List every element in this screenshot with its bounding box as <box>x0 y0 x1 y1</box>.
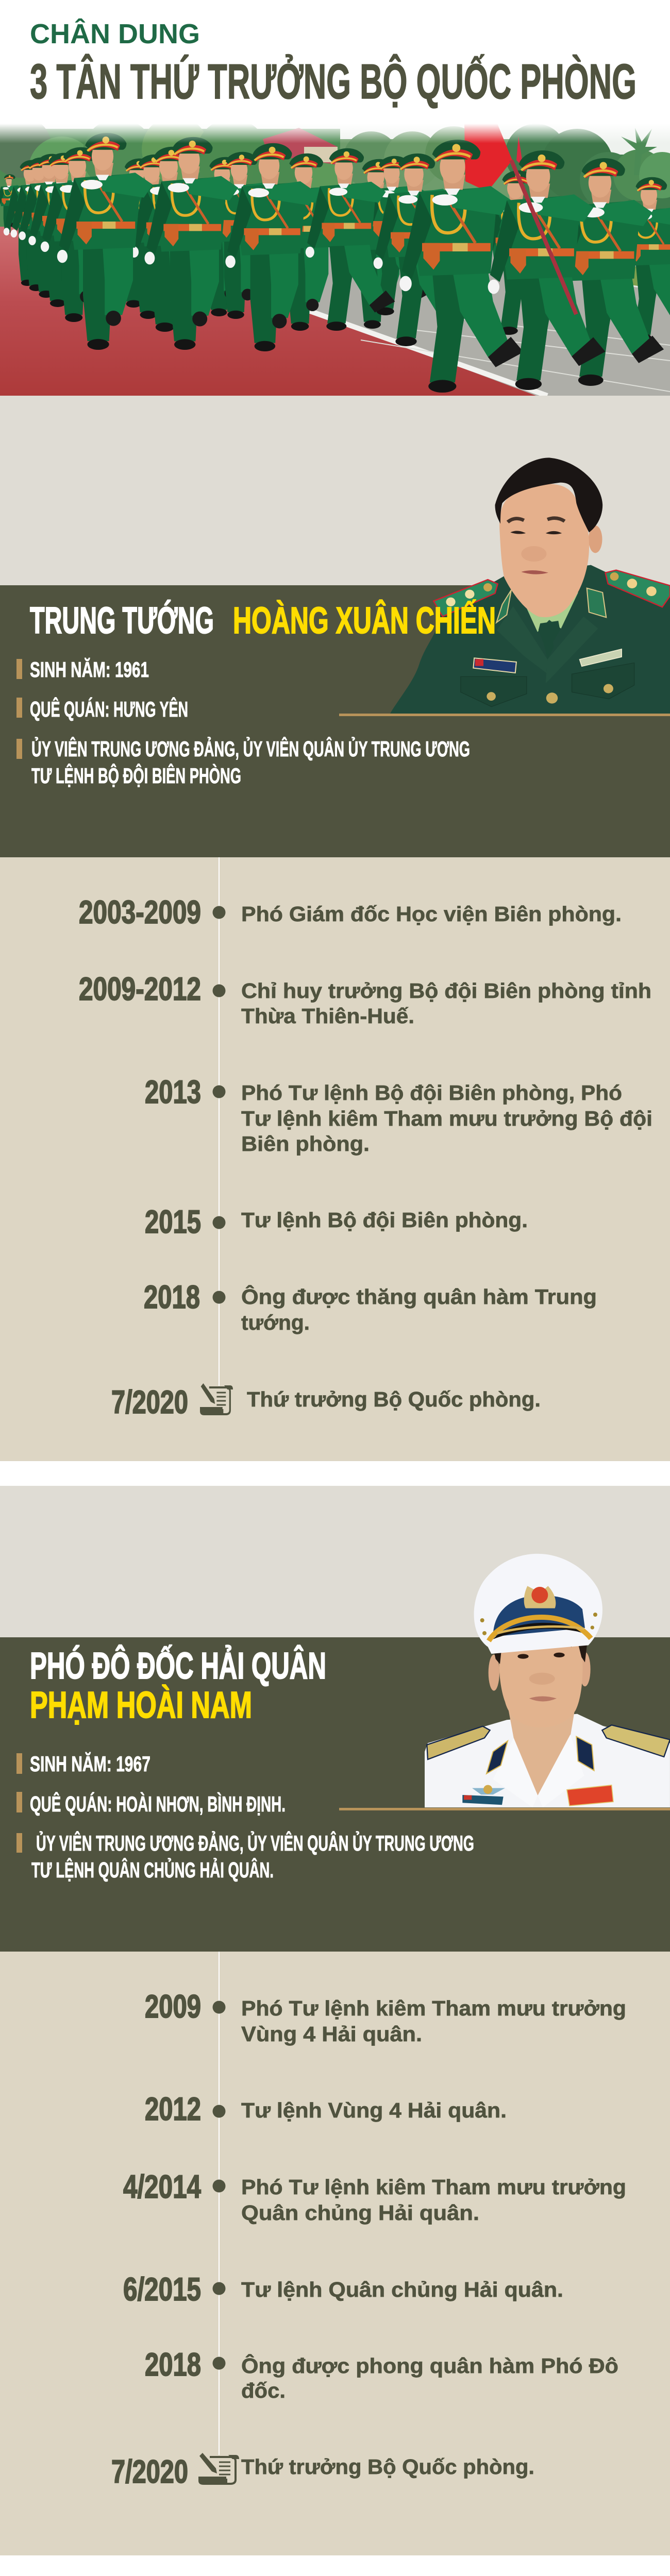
profile details 2: TƯ LỆNH QUÂN CHỦNG HẢI QUÂN. <box>31 1857 274 1882</box>
entry 2003-2009: Phó Giám đốc Học viện Biên phòng. <box>241 902 622 926</box>
hero photo: marching soldiers <box>0 116 670 396</box>
entry 7/2020: Thứ trưởng Bộ Quốc phòng. <box>247 1387 541 1411</box>
entry 7/2020: 7/2020 <box>111 2454 188 2490</box>
entry 4/2014: Phó Tư lệnh kiêm Tham mưu trưởng <box>241 2175 626 2199</box>
name: Phạm Hoài Nam: PHẠM HOÀI NAM <box>30 1685 252 1726</box>
accent rule <box>339 1808 670 1810</box>
entry 2018: Ông được phong quân hàm Phó Đô <box>241 2354 618 2378</box>
entry 2003-2009: 2003-2009 <box>79 894 201 930</box>
entry 2013: Phó Tư lệnh Bộ đội Biên phòng, Phó <box>241 1081 622 1105</box>
entry 2018: 2018 <box>145 2347 201 2383</box>
name: Hoàng Xuân Chiến: HOÀNG XUÂN CHIẾN <box>233 600 496 641</box>
entry 2015: 2015 <box>145 1204 201 1240</box>
timeline 2 <box>111 1989 626 2490</box>
portrait: Phạm Hoài Nam <box>425 1554 670 1807</box>
entry 2018 <box>144 1279 597 1334</box>
entry 2012 <box>145 2091 507 2127</box>
entry 2009 <box>145 1989 626 2046</box>
entry 2013: Tư lệnh kiêm Tham mưu trưởng Bộ đội <box>241 1107 652 1130</box>
profile details 1: TƯ LỆNH BỘ ĐỘI BIÊN PHÒNG <box>31 763 241 788</box>
portrait: Hoàng Xuân Chiến <box>390 457 670 714</box>
title: CHÂN DUNG <box>30 18 200 49</box>
entry 2018: Ông được thăng quân hàm Trung <box>241 1285 597 1309</box>
entry 7/2020: 7/2020 <box>111 1384 188 1420</box>
entry 2018: tướng. <box>241 1311 310 1334</box>
entry 6/2015: 6/2015 <box>123 2272 201 2308</box>
name: Phạm Hoài Nam <box>30 1645 326 1726</box>
entry 2018: 2018 <box>144 1279 200 1315</box>
entry 2009-2012 <box>79 971 651 1028</box>
timeline 1 <box>79 894 652 1420</box>
entry 2015 <box>145 1204 528 1240</box>
entry 6/2015 <box>123 2272 563 2308</box>
name: Hoàng Xuân Chiến: TRUNG TƯỚNG <box>30 600 214 641</box>
entry 2009-2012: 2009-2012 <box>79 971 201 1007</box>
entry 2018 <box>145 2347 618 2402</box>
accent rule <box>339 714 670 716</box>
profile details 1: SINH NĂM: 1961 <box>30 657 149 682</box>
name: Phạm Hoài Nam: PHÓ ĐÔ ĐỐC HẢI QUÂN <box>30 1645 326 1687</box>
entry 2012: 2012 <box>145 2091 201 2127</box>
entry 2009: Vùng 4 Hải quân. <box>241 2022 422 2046</box>
title <box>30 18 636 109</box>
entry 2013 <box>145 1074 652 1156</box>
section 2 background <box>0 1486 670 2555</box>
profile details 1: QUÊ QUÁN: HƯNG YÊN <box>30 697 188 721</box>
entry 2009: 2009 <box>145 1989 201 2025</box>
name: Hoàng Xuân Chiến <box>30 600 496 641</box>
entry 2018: đốc. <box>241 2379 286 2402</box>
entry 6/2015: Tư lệnh Quân chủng Hải quân. <box>241 2278 563 2301</box>
entry 2003-2009 <box>79 894 622 930</box>
profile details 2 <box>16 1752 474 1882</box>
entry 2009-2012: Thừa Thiên-Huế. <box>241 1004 414 1028</box>
section 1 background <box>0 396 670 1461</box>
section 2: Phạm Hoài Nam <box>0 1486 670 2555</box>
entry 2009: Phó Tư lệnh kiêm Tham mưu trưởng <box>241 1996 626 2020</box>
entry 4/2014 <box>123 2169 626 2225</box>
entry 2009-2012: Chỉ huy trưởng Bộ đội Biên phòng tỉnh <box>241 979 651 1003</box>
entry 2013: 2013 <box>145 1074 201 1110</box>
profile details 2: QUÊ QUÁN: HOÀI NHƠN, BÌNH ĐỊNH. <box>30 1791 286 1816</box>
entry 7/2020 <box>111 2453 534 2490</box>
profile details 1 <box>16 657 470 788</box>
entry 4/2014: 4/2014 <box>123 2169 201 2205</box>
entry 7/2020 <box>111 1383 541 1420</box>
entry 7/2020: Thứ trưởng Bộ Quốc phòng. <box>241 2455 534 2479</box>
entry 4/2014: Quân chủng Hải quân. <box>241 2201 479 2225</box>
entry 2015: Tư lệnh Bộ đội Biên phòng. <box>241 1208 528 1232</box>
entry 2013: Biên phòng. <box>241 1132 370 1156</box>
entry 2012: Tư lệnh Vùng 4 Hải quân. <box>241 2098 507 2122</box>
section 1: header, hero and Hoàng Xuân Chiến <box>0 18 670 1461</box>
profile details 2: SINH NĂM: 1967 <box>30 1752 150 1776</box>
